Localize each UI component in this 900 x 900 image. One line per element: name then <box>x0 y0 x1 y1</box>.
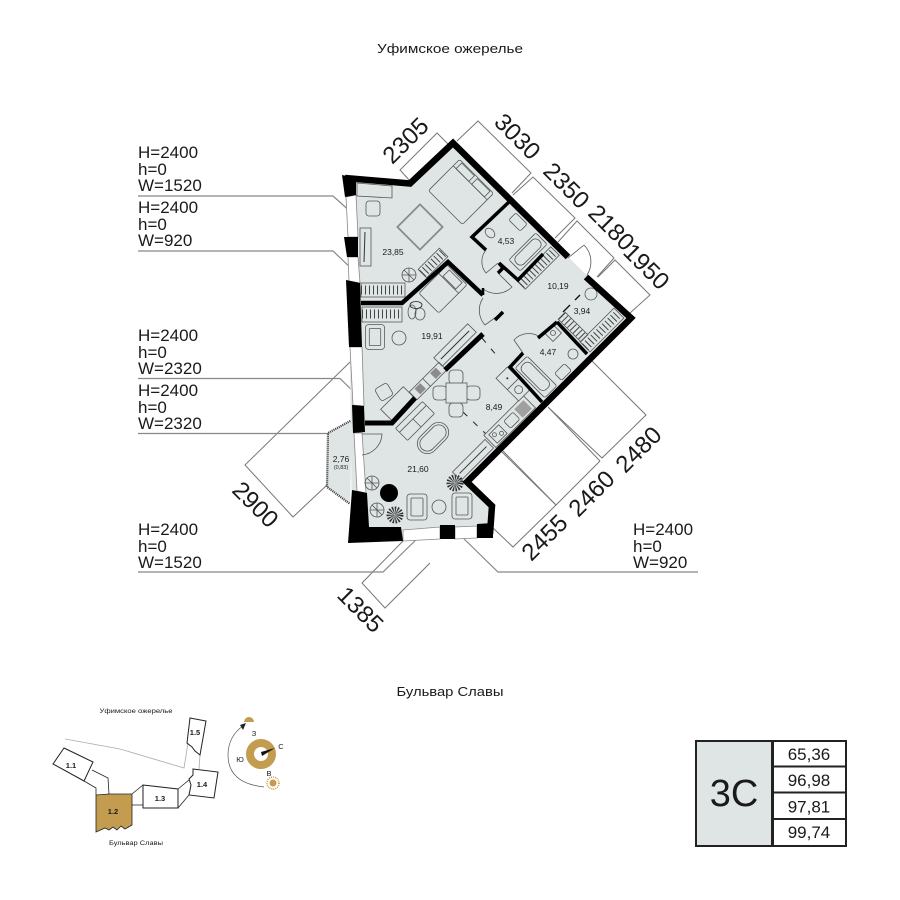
building 1.5: 1.5 <box>190 728 200 737</box>
type cell: 3С <box>710 773 758 815</box>
dimension labels: 2460 <box>564 466 620 522</box>
building 1.5 <box>187 718 206 755</box>
type cell <box>696 741 772 846</box>
room areas: 23,85 <box>382 247 404 257</box>
interior walls <box>361 201 587 423</box>
building 1.2 <box>96 794 132 832</box>
furniture: room 19,91 <box>362 265 476 421</box>
sink <box>509 213 527 231</box>
shrub <box>450 478 460 488</box>
wardrobe <box>580 308 624 352</box>
building 1.3 <box>143 785 178 808</box>
cardinal labels: С <box>278 742 284 751</box>
shrub <box>390 510 400 520</box>
panel: site key map <box>53 708 284 847</box>
wardrobe <box>517 247 559 289</box>
wardrobe <box>361 283 405 297</box>
cardinal labels <box>236 729 284 778</box>
room areas: 8,49 <box>486 402 503 412</box>
dimension labels: 1385 <box>332 582 388 638</box>
window specs and leader lines: h=0 <box>138 215 167 234</box>
armchair <box>374 382 394 402</box>
window specs and leader lines: H=2400 <box>138 326 198 345</box>
title: street top: Уфимское ожерелье <box>377 41 523 56</box>
room areas: 10,19 <box>547 281 569 291</box>
plant <box>370 503 384 517</box>
window specs and leader lines: W=1520 <box>138 176 202 195</box>
building 1.1 <box>53 748 93 781</box>
bed <box>428 159 494 225</box>
window specs and leader lines: W=2320 <box>138 359 202 378</box>
window specs and leader lines: H=2400 <box>138 381 198 400</box>
armchair <box>452 493 472 519</box>
dimension labels: 2900 <box>227 477 283 533</box>
furniture: bedroom 23,85 <box>357 159 494 297</box>
dining table <box>433 370 480 417</box>
coffee table <box>413 418 453 458</box>
room areas <box>333 236 591 474</box>
floor area <box>348 143 630 538</box>
area cells <box>773 741 846 846</box>
balcony <box>327 420 352 504</box>
tv unit <box>360 228 371 266</box>
exterior walls <box>342 143 631 543</box>
wardrobe <box>558 312 588 342</box>
cardinal labels: Ю <box>236 755 244 764</box>
bathtub <box>509 233 547 271</box>
armchair <box>407 494 427 520</box>
room areas: 3,94 <box>574 306 591 316</box>
dimension labels: 1950 <box>618 239 674 295</box>
needle <box>261 748 275 756</box>
window specs and leader lines: H=2400 <box>138 520 198 539</box>
building 1.3: 1.3 <box>155 794 165 803</box>
room areas: (0,83) <box>334 465 348 471</box>
sink unit <box>496 367 530 401</box>
room areas: 19,91 <box>421 331 443 341</box>
area values <box>788 745 830 842</box>
wardrobe <box>362 307 402 322</box>
window specs and leader lines: H=2400 <box>138 198 198 217</box>
side table <box>392 331 406 345</box>
dimension labels: 2455 <box>517 510 573 566</box>
round appliance <box>585 288 597 300</box>
furniture: bathrooms <box>483 213 624 398</box>
dimension labels: 2305 <box>378 113 434 169</box>
area values: 99,74 <box>788 823 830 842</box>
building 1.1: 1.1 <box>66 761 76 770</box>
site outline <box>65 739 200 769</box>
window specs and leader lines: h=0 <box>138 537 167 556</box>
desk <box>357 183 392 198</box>
sun bottom <box>267 777 279 789</box>
room areas: 2,76 <box>333 454 350 464</box>
window specs and leader lines: W=1520 <box>138 553 202 572</box>
sun path arrow <box>228 726 264 787</box>
short partition dashes <box>563 295 580 312</box>
dashed zone lines <box>463 338 497 436</box>
caption: bottom street: Бульвар Славы <box>109 840 163 847</box>
caption: top street: Уфимское ожерелье <box>100 708 173 715</box>
window specs and leader lines: h=0 <box>138 343 167 362</box>
dimension labels <box>227 109 674 638</box>
area values: 65,36 <box>788 745 830 764</box>
dimension labels: 3030 <box>489 109 545 165</box>
building 1.4 <box>189 769 218 798</box>
low unit <box>452 439 494 481</box>
room areas: 21,60 <box>407 464 429 474</box>
connectors <box>84 770 189 808</box>
window specs and leader lines: W=920 <box>633 553 687 572</box>
window specs and leader lines: H=2400 <box>138 143 198 162</box>
wardrobe <box>418 248 448 278</box>
window strips <box>346 195 477 541</box>
window specs and leader lines: h=0 <box>138 398 167 417</box>
bathtub <box>515 356 557 398</box>
sun top <box>244 717 254 722</box>
unit <box>434 324 476 366</box>
dimension lines <box>245 121 650 608</box>
dimension labels: 2480 <box>611 422 667 478</box>
window specs and leader lines: H=2400 <box>633 520 693 539</box>
area values: 96,98 <box>788 771 830 790</box>
chair <box>366 201 380 216</box>
room areas: 4,53 <box>498 236 515 246</box>
appliances <box>409 362 447 400</box>
furniture: kitchen-living <box>365 367 535 520</box>
area values: 97,81 <box>788 798 830 816</box>
plant <box>402 268 416 282</box>
doors <box>362 245 591 455</box>
room areas: 4,47 <box>540 347 557 357</box>
armchair <box>366 325 384 349</box>
building 1.2: 1.2 <box>108 807 118 816</box>
window specs and leader lines: h=0 <box>633 537 662 556</box>
dimension labels: 2180 <box>583 200 639 256</box>
toilet <box>568 349 578 359</box>
building 1.4: 1.4 <box>197 780 208 789</box>
rug <box>397 204 443 250</box>
bed <box>419 265 467 313</box>
window specs and leader lines: W=920 <box>138 231 192 250</box>
desk <box>381 387 415 421</box>
toilet <box>483 226 497 240</box>
side table <box>432 500 446 514</box>
kitchen counter <box>484 396 535 447</box>
sofa <box>396 402 434 440</box>
window specs and leader lines: h=0 <box>138 160 167 179</box>
boiler <box>545 325 561 341</box>
title: street bottom: Бульвар Славы <box>396 684 504 699</box>
panel: floor plan <box>327 143 631 543</box>
leaf plant <box>408 302 425 320</box>
orientation ring <box>250 743 272 765</box>
window specs and leader lines <box>138 143 698 572</box>
dimension labels: 2350 <box>538 158 594 214</box>
cardinal labels: З <box>252 729 257 738</box>
cardinal labels: В <box>266 769 272 778</box>
plant <box>365 476 379 490</box>
column <box>380 484 398 502</box>
compass <box>228 717 284 789</box>
window specs and leader lines: W=2320 <box>138 414 202 433</box>
sink <box>555 364 571 380</box>
arrowhead <box>240 723 246 730</box>
panel: apartment type table <box>696 741 846 846</box>
